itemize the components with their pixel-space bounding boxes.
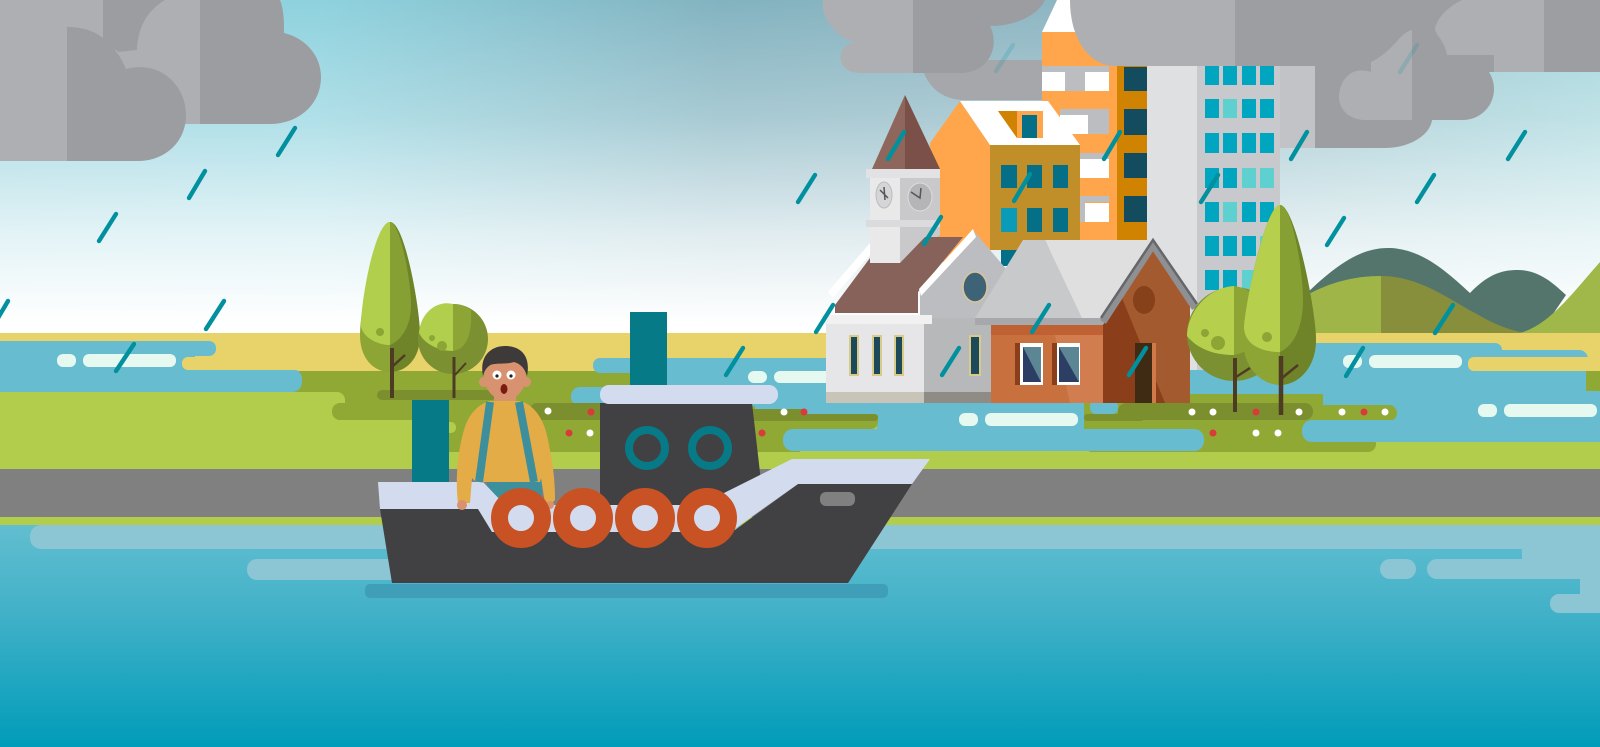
tower windows — [1205, 66, 1274, 290]
house gable end — [1103, 250, 1190, 403]
ground: dark grass — [290, 371, 800, 452]
ground: sand band — [0, 333, 1600, 372]
life rings — [500, 496, 728, 540]
clock tower — [866, 169, 940, 263]
sky — [0, 0, 1600, 334]
orange tower — [1042, 0, 1147, 242]
boat deck — [378, 459, 930, 532]
house windows — [1015, 343, 1080, 385]
tree: round left — [418, 303, 488, 398]
tree: round right — [1187, 286, 1281, 412]
ground: sand pills — [182, 357, 1600, 371]
road — [0, 469, 1600, 517]
house door — [1135, 343, 1152, 403]
ground: right dark grass — [752, 371, 1600, 452]
tree: tall left — [360, 222, 420, 398]
church windows — [850, 336, 980, 375]
church walls — [826, 318, 924, 394]
brick house — [975, 240, 1197, 403]
grey apartment tower — [1147, 60, 1316, 370]
person trousers — [487, 480, 542, 506]
ground: darker grass pills — [377, 390, 1313, 421]
person suspenders — [479, 402, 534, 482]
house front wall — [991, 325, 1103, 403]
rear funnel — [412, 400, 449, 483]
church — [822, 95, 1007, 403]
house roof — [1045, 240, 1153, 320]
sea reflections — [30, 525, 1600, 613]
cabin roof — [600, 385, 778, 404]
boat hull — [380, 484, 912, 583]
back storm cloud behind buildings — [920, 60, 1042, 100]
boat — [365, 312, 930, 598]
storm clouds: top right — [1070, 0, 1600, 148]
cabin — [600, 403, 762, 515]
person — [457, 346, 555, 510]
storm clouds: top centre — [823, 0, 1045, 73]
ground: water channels — [0, 341, 1600, 451]
grass strip — [0, 517, 1600, 525]
church spire — [872, 95, 940, 169]
person head — [479, 346, 531, 400]
ground: dark pill on the left — [332, 403, 472, 420]
church gable — [920, 230, 1007, 325]
water foam bars — [57, 354, 1597, 426]
flower dots — [544, 408, 1388, 436]
church roof — [835, 237, 963, 313]
front funnel — [630, 312, 667, 387]
ground: water lower right pills — [1060, 400, 1600, 451]
hills — [1300, 248, 1600, 333]
rain — [0, 45, 1525, 376]
person hands — [457, 500, 554, 510]
ground: left light grass — [0, 392, 1600, 470]
ground: light grass base — [0, 371, 1600, 470]
person neck — [494, 392, 516, 404]
mustard apartment building — [930, 101, 1080, 266]
hull window — [820, 492, 855, 506]
small cloud below top right — [1339, 30, 1412, 120]
mustard building windows — [1001, 165, 1068, 266]
person body — [457, 401, 555, 503]
portholes — [629, 430, 728, 466]
tree: tall right — [1243, 205, 1316, 415]
boat reflection — [365, 584, 888, 598]
sea — [0, 525, 1600, 747]
storm clouds: top left — [0, 0, 321, 161]
dark lobe — [1432, 58, 1494, 120]
